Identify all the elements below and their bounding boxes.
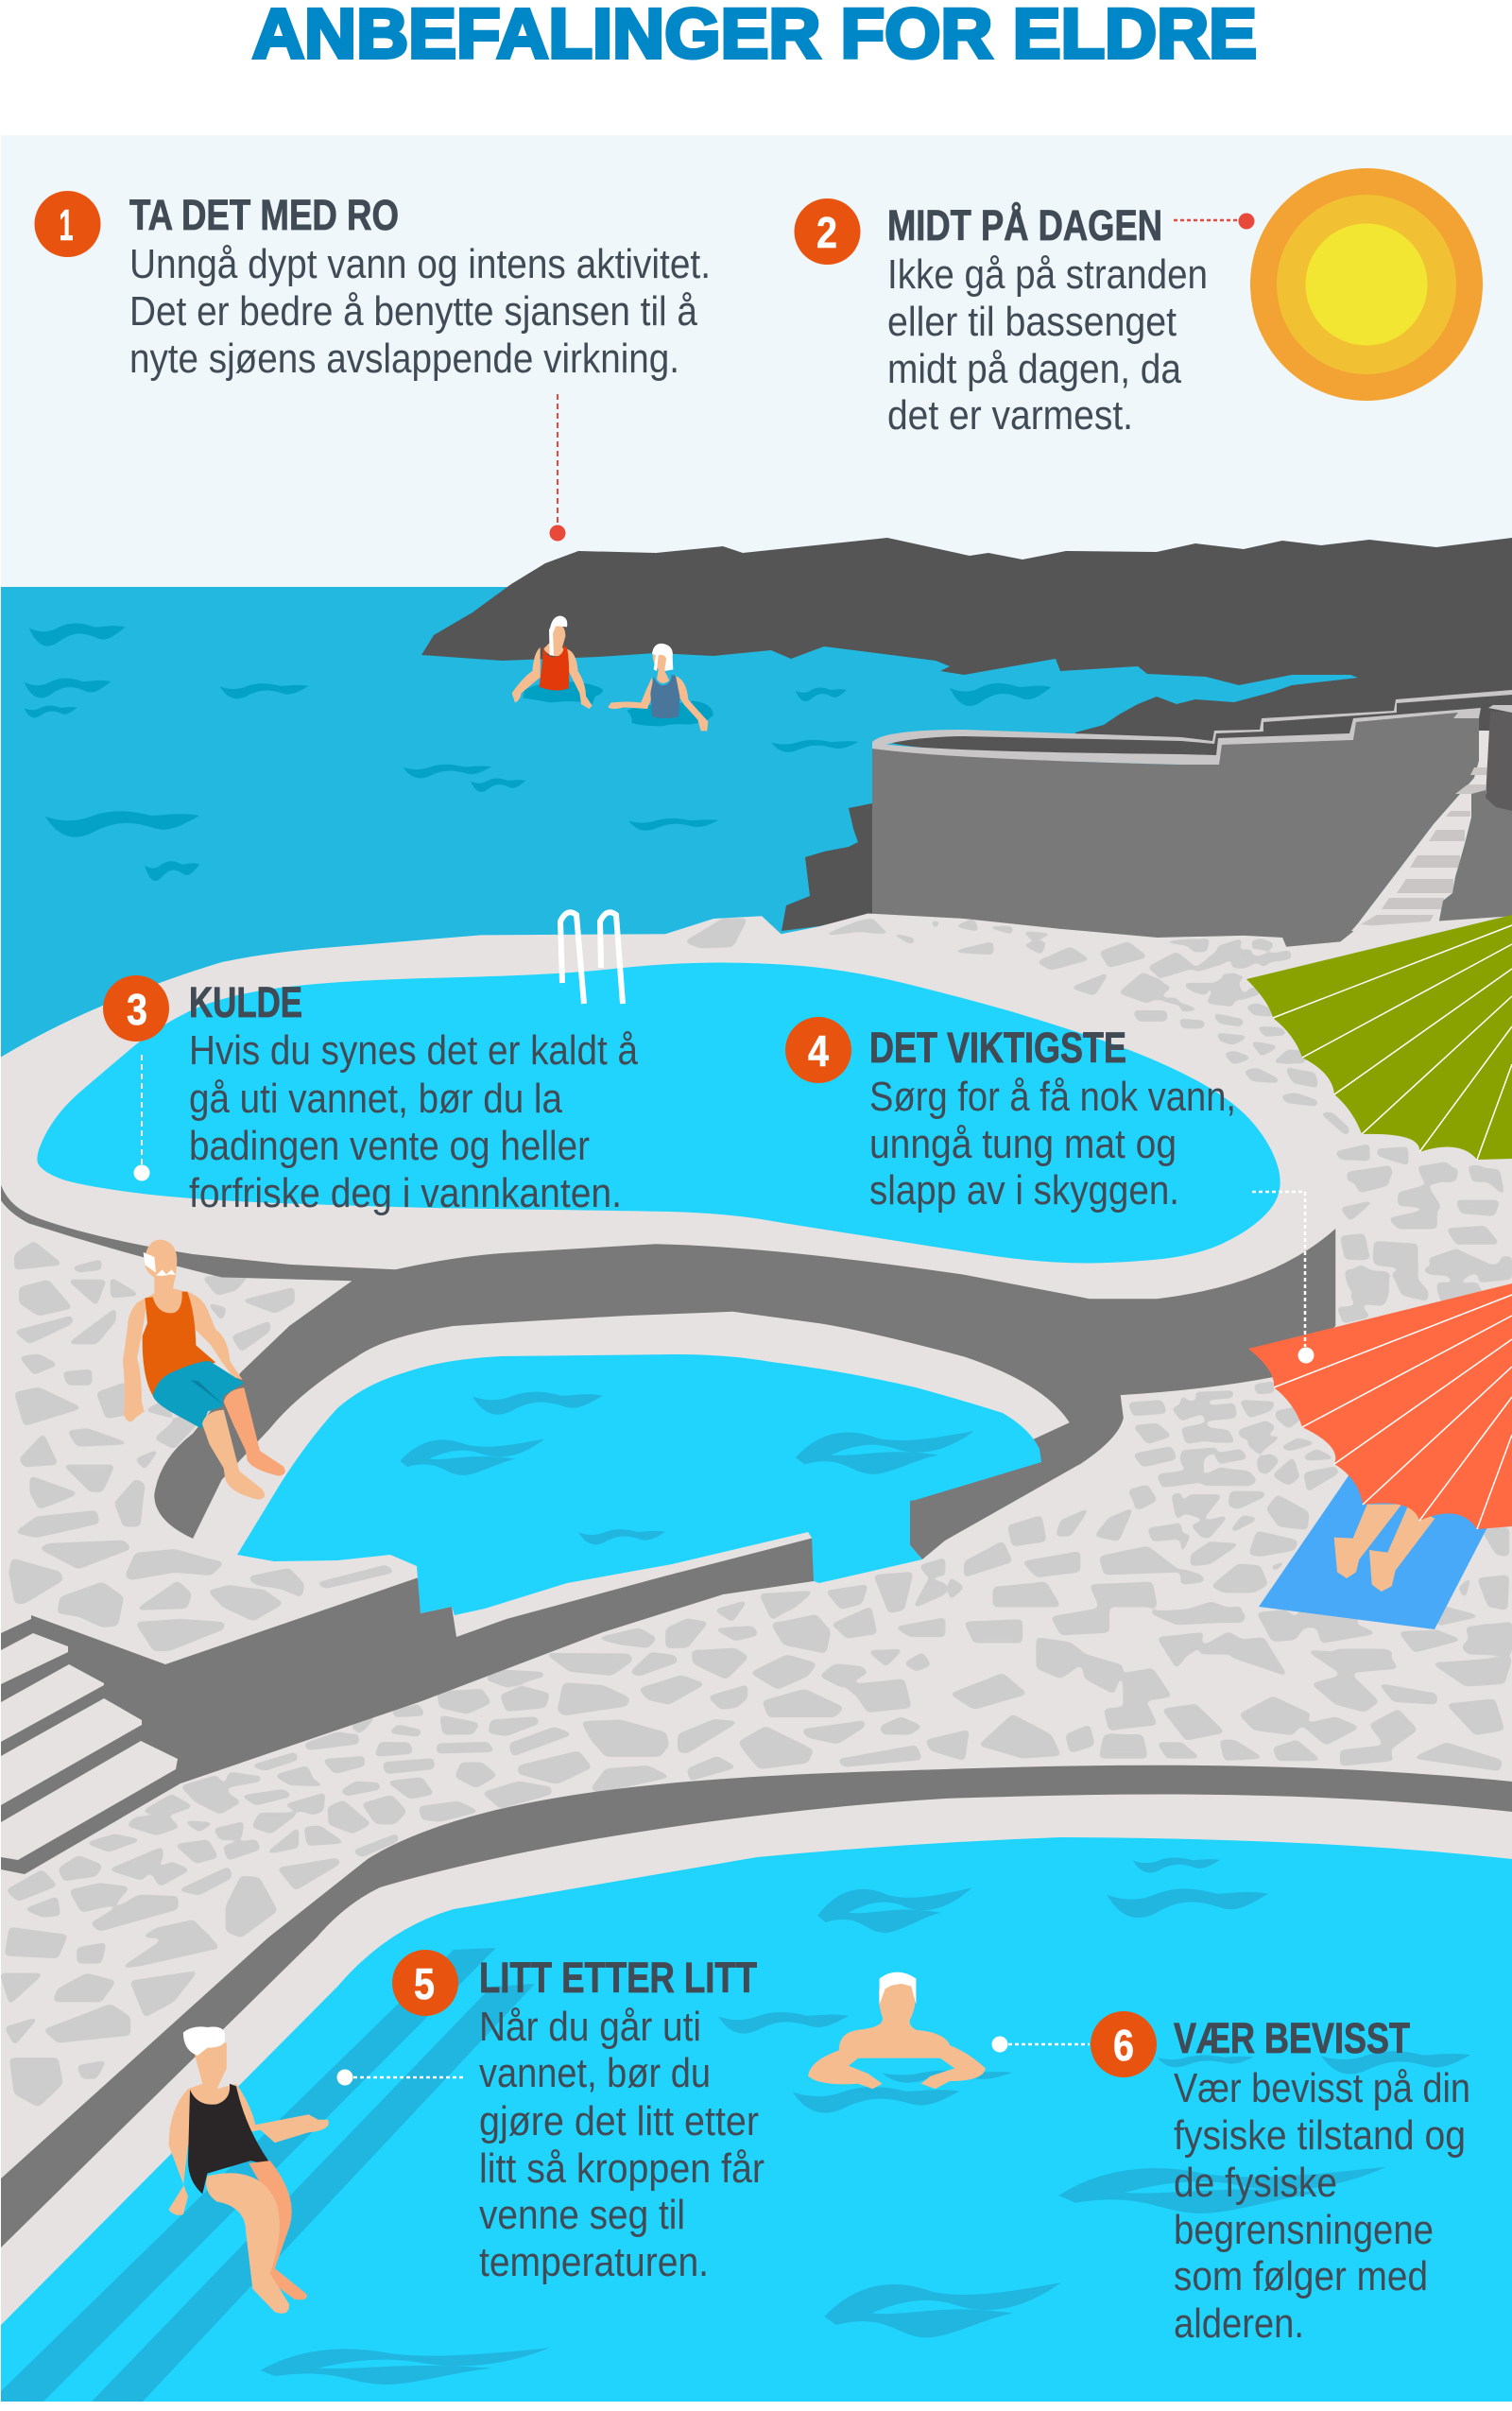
lower pool wall bbox=[1, 1765, 1512, 2247]
pointer 2 bbox=[1174, 214, 1255, 229]
stair treads bbox=[1, 1633, 178, 1860]
pointer 4 bbox=[1252, 1192, 1314, 1363]
callout 1: TA DET MED RO bbox=[129, 191, 399, 239]
callout 6: begrensningene bbox=[1174, 2207, 1434, 2253]
sea waves bbox=[25, 623, 1051, 881]
front wall rim bbox=[872, 708, 1481, 765]
callout 4 bbox=[785, 1017, 1236, 1214]
callout 1 bbox=[34, 191, 711, 382]
dark road around the pools bbox=[1, 1185, 1335, 1539]
callout 6: Vær bevisst på din bbox=[1174, 2065, 1470, 2111]
dark lower wall and stair base bbox=[1, 1538, 814, 1874]
pillar bbox=[1486, 712, 1512, 811]
stones: next to green parasol bbox=[1181, 939, 1496, 1181]
stones: left of pools bbox=[14, 1241, 294, 1470]
callout 1: 1 bbox=[59, 200, 74, 250]
callout 5: litt så kroppen får bbox=[479, 2145, 765, 2192]
middle pool water bbox=[237, 1354, 1041, 1615]
callout 6: som følger med bbox=[1174, 2253, 1428, 2299]
stones: centre band (left part) bbox=[6, 1465, 945, 1937]
callout 5: gjøre det litt etter bbox=[479, 2098, 759, 2144]
green parasol bbox=[1246, 915, 1512, 1160]
stones: top right bbox=[684, 919, 1512, 1303]
callout 6: fysiske tilstand og bbox=[1174, 2112, 1466, 2159]
callout 3: badingen vente og heller bbox=[189, 1123, 590, 1169]
paving stones bbox=[0, 919, 1512, 2107]
upper pool water bbox=[37, 963, 1280, 1263]
callout 2: Ikke gå på stranden bbox=[887, 251, 1208, 298]
callout 5: venne seg til bbox=[479, 2192, 685, 2238]
callout 1: Det er bedre å benytte sjansen til å bbox=[129, 288, 697, 335]
stones: below red parasol bbox=[1181, 1260, 1511, 1654]
grey pool wall bbox=[872, 713, 1479, 955]
callout 2: MIDT PÅ DAGEN bbox=[887, 201, 1162, 250]
callout 6: VÆR BEVISST bbox=[1174, 2014, 1410, 2062]
paving and deck bbox=[1, 914, 1512, 2340]
pointer 5 bbox=[336, 2070, 463, 2085]
middle pool waves bbox=[400, 1392, 974, 1544]
sky background bbox=[1, 135, 1512, 589]
callout 6: de fysiske bbox=[1174, 2160, 1337, 2206]
callout 3: forfriske deg i vannkanten. bbox=[189, 1170, 622, 1216]
sitting woman bbox=[169, 2026, 329, 2314]
lower pool waves bbox=[261, 1857, 1470, 2385]
upper pool wall rim (back) bbox=[872, 690, 1512, 747]
stairs bbox=[1351, 731, 1489, 936]
callout 2: det er varmest. bbox=[887, 392, 1133, 439]
callout 5: Når du går uti bbox=[479, 2004, 701, 2050]
callout 4: 4 bbox=[808, 1026, 829, 1076]
red parasol bbox=[1248, 1283, 1512, 1529]
callout 6: alderen. bbox=[1174, 2300, 1304, 2347]
lower pool water bbox=[1, 1837, 1512, 2402]
callout 6: 6 bbox=[1113, 2021, 1134, 2070]
callout 4: unngå tung mat og bbox=[869, 1121, 1177, 1167]
callout 1: nyte sjøens avslappende virkning. bbox=[129, 336, 679, 382]
swimming man bbox=[808, 1972, 986, 2089]
swimmers in the sea bbox=[512, 616, 713, 731]
callout 4: Sørg for å få nok vann, bbox=[869, 1074, 1236, 1120]
lane stripes bbox=[1, 1948, 535, 2402]
pointer 6 bbox=[992, 2036, 1090, 2053]
right rock wall bbox=[1436, 790, 1512, 936]
callout 2: eller til bassenget bbox=[887, 299, 1177, 345]
stones: right of middle pool bbox=[950, 1398, 1215, 1607]
right wall of middle pool bbox=[910, 1418, 1080, 1559]
callout 3: 3 bbox=[127, 985, 147, 1034]
callout 5: 5 bbox=[414, 1959, 435, 2008]
callout 4: slapp av i skyggen. bbox=[869, 1167, 1179, 1214]
pointer 3 bbox=[134, 1055, 149, 1181]
towel bbox=[1259, 1474, 1490, 1629]
callout 1: Unngå dypt vann og intens aktivitet. bbox=[129, 241, 711, 287]
sea bbox=[1, 587, 1512, 1154]
callout 5: temperaturen. bbox=[479, 2239, 709, 2285]
callout 6 bbox=[1091, 2011, 1470, 2347]
dark cliff bbox=[421, 538, 1512, 756]
sun bbox=[1250, 168, 1483, 401]
pillar top bbox=[1488, 705, 1512, 713]
callout 3: gå uti vannet, bør du la bbox=[189, 1076, 562, 1122]
callout 3: KULDE bbox=[189, 978, 302, 1026]
callout 4: DET VIKTIGSTE bbox=[869, 1024, 1126, 1072]
callout 2: midt på dagen, da bbox=[887, 346, 1181, 392]
left rock bbox=[782, 803, 872, 931]
callout 3 bbox=[103, 975, 638, 1216]
pointer 1 bbox=[550, 394, 565, 541]
wall rim interior bbox=[879, 733, 1219, 758]
callout 2: 2 bbox=[816, 208, 837, 257]
sitting man bbox=[123, 1240, 285, 1500]
callout 2 bbox=[794, 198, 1208, 439]
callout 3: Hvis du synes det er kaldt å bbox=[189, 1027, 638, 1074]
callout 5 bbox=[392, 1950, 765, 2285]
callout 5: vannet, bør du bbox=[479, 2050, 711, 2096]
callout 5: LITT ETTER LITT bbox=[479, 1954, 757, 2002]
stones: centre band (right part and lower left) bbox=[0, 1607, 1512, 2107]
pool ladder bbox=[560, 912, 623, 1004]
sunbather legs bbox=[1334, 1505, 1435, 1592]
